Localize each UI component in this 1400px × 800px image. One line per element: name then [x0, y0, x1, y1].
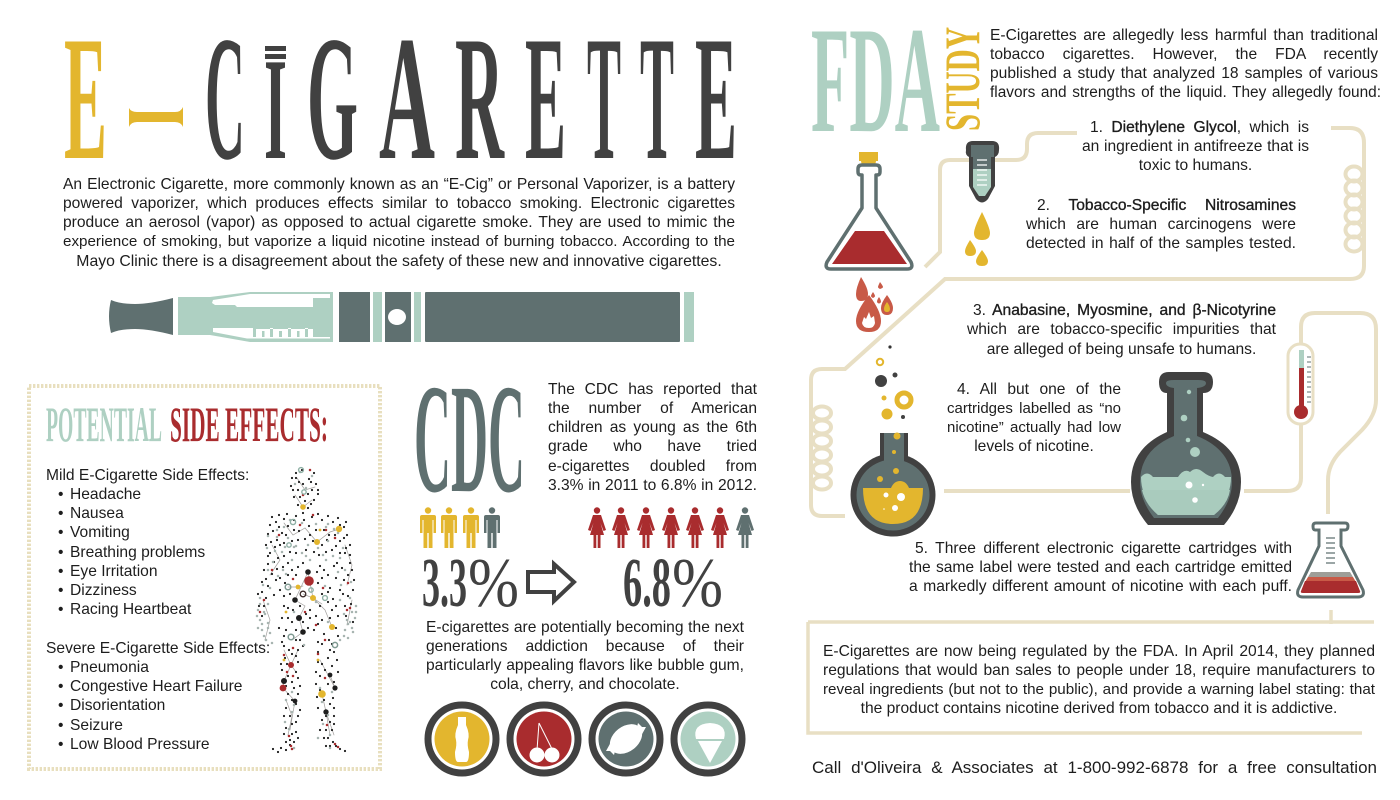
icon: flame drops [856, 277, 893, 332]
text block: finding 5: 5. Three different electronic cigarette cartridges with [915, 540, 1292, 556]
text block: mild side effects: • [58, 524, 63, 541]
text block: severe side effects: • [58, 736, 63, 753]
text block: severe side effects: Congestive Heart Failure [70, 678, 242, 695]
icon: small erlenmeyer flask [1298, 523, 1363, 597]
text block: finding 3: which are tobacco-specific impurities that [967, 321, 1276, 338]
text block: finding 4: levels of nicotine. [974, 438, 1094, 455]
text block: finding 1: toxic to humans. [1139, 157, 1252, 174]
text block: mild side effects: • [58, 563, 63, 580]
text block: finding 4: cartridges labelled as “no [947, 400, 1121, 417]
text block: intro: experience of smoking, but vaporize a liquid nicotine instead of burning tobacco. According to the [63, 233, 735, 250]
text block: finding 2 [1026, 196, 1296, 252]
text block: severe side effects: Low Blood Pressure [70, 736, 210, 753]
text block: FDA intro [990, 26, 1381, 101]
text block: mild side effects: • [58, 582, 63, 599]
text block: finding 1: 1. Diethylene Glycol, which is [1090, 118, 1309, 136]
text block: FDA regulation: reveal ingredients (but not to the public), and provide a warning label stating: that [823, 681, 1375, 698]
text block: CDC report: e-cigarettes doubled from [548, 458, 757, 474]
text block: mild side effects: Dizziness [70, 582, 137, 599]
statistic: 3.3%: 3.3 [422, 545, 467, 622]
text block: FDA intro: E-Cigarettes are allegedly less harmful than traditional [990, 26, 1378, 44]
icon: bubbles above yellow flask [875, 345, 911, 420]
icon: seven women 6.8 percent [588, 507, 754, 548]
text block: mild side effects: • [58, 486, 63, 503]
text block: mild side effects: • [58, 544, 63, 560]
text block: severe side effects: • [58, 678, 63, 695]
title: E-Cigarette: T [587, 0, 621, 197]
text block: FDA regulation: the product contains nicotine derived from tobacco and it is addictive. [861, 700, 1337, 717]
text block: severe side effects: • [58, 659, 63, 676]
text block: FDA intro: flavors and strengths of the liquid. They allegedly found: [990, 84, 1381, 101]
text block: CDC report: children as young as the 6th [548, 419, 757, 436]
icon: human body made of dots [257, 468, 356, 752]
icon: dropper [966, 141, 999, 202]
text block: severe side effects: Seizure [70, 716, 123, 734]
text block: mild side effects: Nausea [70, 505, 124, 522]
text block: FDA intro: tobacco cigarettes. However, the FDA recently [990, 46, 1378, 63]
title: E-Cigarette: T [640, 0, 674, 197]
statistic: 6.8%: % [672, 545, 723, 622]
icon: four men 3.3 percent [420, 507, 500, 548]
text block: flavors: generations addiction because of their [426, 638, 744, 655]
heading: potential side effects: POTENTIAL [46, 396, 162, 452]
text block: mild side effects: Breathing problems [70, 544, 205, 560]
icon: ice cream cone [674, 705, 742, 773]
text block: finding 3: are alleged of being unsafe to humans. [987, 340, 1256, 358]
statistic: 6.8%: 6.8 [623, 545, 671, 622]
text block: finding 1 [1082, 118, 1309, 174]
footer: call to action: Call d'Oliveira & Associates at 1-800-992-6878 for a free consultation [812, 758, 1377, 777]
text block: FDA regulation: regulations that would ban sales to people under 18, require manufacturers to [823, 662, 1375, 679]
text block: flavors: E-cigarettes are potentially becoming the next [426, 618, 744, 636]
text block: severe side effects [46, 640, 270, 753]
title: E-Cigarette: G [307, 0, 358, 197]
icon: large round flask with mint liquid [1131, 372, 1241, 525]
text block: severe side effects: Disorientation [70, 697, 165, 714]
text block: flavors: particularly appealing flavors like bubble gum, [426, 657, 744, 674]
text block: CDC report [548, 380, 757, 494]
panel: side effects border [29, 386, 380, 769]
text block: intro: Mayo Clinic there is a disagreement about the safety of these new and innovative cigarettes. [76, 252, 722, 270]
text block: intro: An Electronic Cigarette, more commonly known as an “E-Cig” or Personal Vaporizer, is a battery [63, 176, 735, 192]
text block: finding 3: 3. Anabasine, Myosmine, and β-Nicotyrine [973, 302, 1276, 319]
text block: mild side effects: Eye Irritation [70, 563, 158, 580]
text block: finding 4 [947, 380, 1121, 455]
text block: finding 2: which are human carcinogens were [1026, 216, 1296, 233]
text block: intro [63, 176, 735, 270]
text block: mild side effects: Racing Heartbeat [70, 601, 191, 618]
title: E-Cigarette: E [525, 0, 566, 197]
title: E-Cigarette: A [379, 0, 435, 197]
text block: severe side effects: • [58, 697, 63, 714]
icon: cherries [510, 705, 578, 773]
text block: severe side effects: Pneumonia [70, 659, 149, 676]
text block: FDA intro: published a study that analyzed 18 samples of various [990, 65, 1378, 82]
text block: intro: powered vaporizer, which produces effects similar to tobacco smoking. Electronic cigarettes [63, 195, 735, 212]
text: CDC [414, 352, 525, 525]
text block: mild side effects: Vomiting [70, 524, 130, 541]
text block: finding 5 [909, 540, 1292, 595]
text block: finding 3 [967, 302, 1276, 358]
pipes: connecting tubes [808, 128, 1376, 733]
text: FDA [811, 0, 940, 164]
title: E-Cigarette: C [205, 0, 245, 197]
text block: finding 4: nicotine” actually had low [947, 419, 1121, 436]
text block: flavors [426, 618, 744, 693]
text block: severe side effects: Severe E-Cigarette Side Effects: [46, 640, 270, 656]
text block: CDC report: 3.3% in 2011 to 6.8% in 2012. [548, 477, 757, 494]
text block: finding 4: 4. All but one of the [957, 380, 1121, 398]
text block: mild side effects: Headache [70, 486, 141, 503]
title: E-Cigarette: R [455, 0, 505, 197]
text block: CDC report: The CDC has reported that [548, 380, 757, 398]
text block: mild side effects: • [58, 601, 63, 618]
text block: CDC report: grade who have tried [548, 438, 757, 455]
title: E-Cigarette [64, 0, 737, 197]
text block: FDA regulation [823, 642, 1375, 717]
text block: finding 5: the same label were tested and each cartridge emitted [909, 559, 1292, 576]
icon: thermometer [1288, 344, 1313, 424]
icon: cola bottle [428, 705, 496, 773]
text: E [695, 0, 737, 197]
text block: CDC report: the number of American [548, 400, 757, 417]
text block: flavors: cola, cherry, and chocolate. [490, 676, 680, 693]
title: E-Cigarette: E [64, 0, 107, 197]
icon: yellow drops [965, 212, 990, 266]
icon: vaporizer pen [109, 292, 694, 342]
text block: mild side effects: • [58, 505, 63, 522]
icon: red erlenmeyer flask with cork [826, 152, 912, 269]
text block: mild side effects: Mild E-Cigarette Side Effects: [46, 466, 249, 484]
text: SIDE EFFECTS: [170, 396, 328, 452]
title: E-Cigarette: I [264, 28, 287, 190]
text block: severe side effects: • [58, 716, 63, 734]
text block: finding 1: an ingredient in antifreeze that is [1082, 138, 1309, 155]
text block: finding 5: a markedly different amount of nicotine with each puff. [909, 578, 1292, 595]
arrow: increase [528, 564, 574, 601]
text block: intro: produce an aerosol (vapor) as opposed to actual cigarette smoke. They are used to mimic the [63, 214, 735, 231]
text block: FDA regulation: E-Cigarettes are now being regulated by the FDA. In April 2014, they planned [823, 642, 1375, 660]
text block: finding 2: detected in half of the samples tested. [1026, 235, 1296, 252]
text block: finding 2: 2. Tobacco-Specific Nitrosamines [1037, 196, 1296, 214]
icon: candy [592, 705, 660, 773]
statistic: 3.3%: % [468, 545, 519, 622]
text block: mild side effects [46, 466, 249, 618]
icon: round flask with yellow liquid [850, 432, 936, 536]
